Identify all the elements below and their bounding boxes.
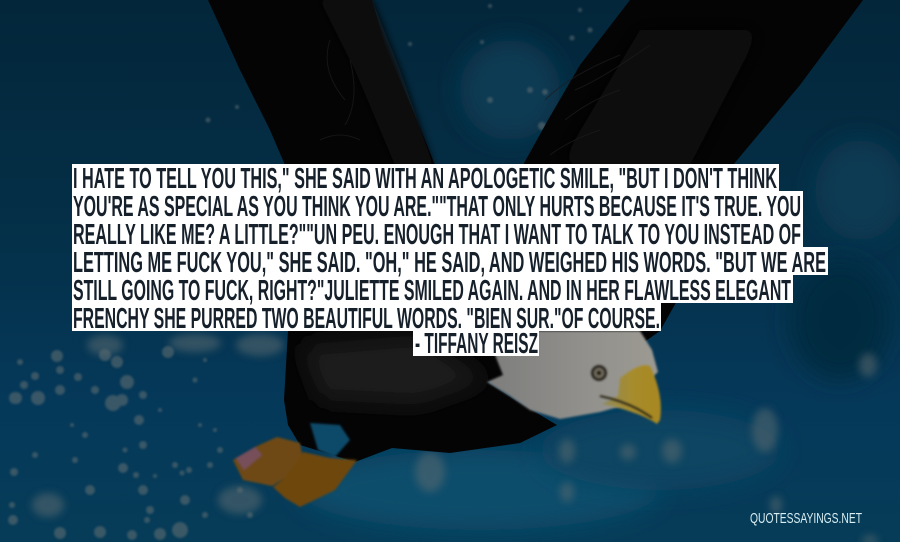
quote lines [73, 163, 826, 335]
author attribution [413, 328, 539, 360]
white highlight rows [72, 164, 828, 331]
author attribution: - TIFFANY REISZ [415, 328, 538, 360]
eye [591, 365, 607, 381]
eagle: talons [233, 423, 357, 507]
quote text block [72, 163, 828, 335]
eagle: head with beak [487, 331, 661, 424]
eagle: wings and body [208, 0, 863, 462]
beak line [600, 396, 652, 418]
beak [602, 365, 661, 424]
